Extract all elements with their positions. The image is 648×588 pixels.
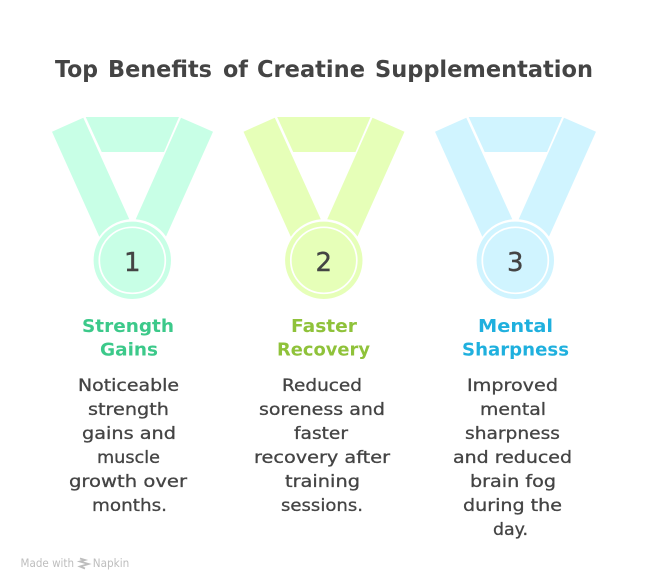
text: faster recovery description: [254, 376, 390, 516]
footer: made with napkin: Napkin: [93, 556, 129, 570]
panel: faster recovery: [244, 117, 404, 516]
text: strength gains description: strength: [88, 400, 169, 420]
icon: napkin logo: [80, 558, 88, 568]
icon: medal 3: 3: [507, 248, 524, 278]
text: faster recovery description: faster: [294, 424, 348, 444]
text: mental sharpness description: day.: [493, 520, 528, 540]
text: mental sharpness description: brain fog: [470, 472, 556, 492]
title: [55, 57, 593, 83]
text: mental sharpness description: during the: [463, 496, 562, 516]
heading: mental sharpness: Mental: [478, 316, 553, 337]
icon: medal 2: [244, 117, 404, 299]
footer: made with napkin: Made with: [21, 556, 74, 570]
text: strength gains description: gains and: [82, 424, 176, 444]
heading: faster recovery: [277, 316, 370, 360]
footer: made with napkin: [21, 556, 129, 570]
title: Creatine: [257, 57, 365, 83]
text: mental sharpness description: [453, 376, 572, 540]
text: mental sharpness description: and reduced: [453, 448, 572, 468]
text: faster recovery description: sessions.: [281, 496, 363, 516]
title: of: [223, 57, 249, 83]
heading: mental sharpness: [462, 316, 569, 360]
title: Top: [55, 57, 98, 83]
title: Supplementation: [375, 57, 593, 83]
text: mental sharpness description: sharpness: [465, 424, 560, 444]
heading: mental sharpness: Sharpness: [462, 340, 569, 360]
text: faster recovery description: soreness and: [259, 400, 385, 420]
heading: strength gains: Gains: [100, 340, 158, 360]
heading: faster recovery: Recovery: [277, 340, 370, 360]
icon: medal 1: [52, 117, 213, 299]
title: Benefits: [108, 57, 212, 83]
icon: medal 3: [435, 117, 596, 299]
text: strength gains description: [69, 376, 187, 516]
heading: strength gains: [82, 316, 174, 360]
panel: strength gains: [52, 117, 213, 516]
text: mental sharpness description: Improved: [467, 376, 558, 396]
text: faster recovery description: training: [285, 472, 360, 492]
icon: medal 1: 1: [124, 248, 141, 278]
text: strength gains description: Noticeable: [78, 376, 179, 396]
panel: mental sharpness: [435, 117, 596, 540]
text: strength gains description: growth over: [69, 472, 187, 492]
text: strength gains description: muscle: [97, 448, 160, 468]
heading: faster recovery: Faster: [291, 316, 357, 337]
text: strength gains description: months.: [92, 496, 167, 516]
text: faster recovery description: recovery after: [254, 448, 390, 468]
heading: strength gains: Strength: [82, 316, 174, 337]
text: faster recovery description: Reduced: [282, 376, 362, 396]
icon: medal 2: 2: [316, 248, 332, 278]
text: mental sharpness description: mental: [480, 400, 546, 420]
